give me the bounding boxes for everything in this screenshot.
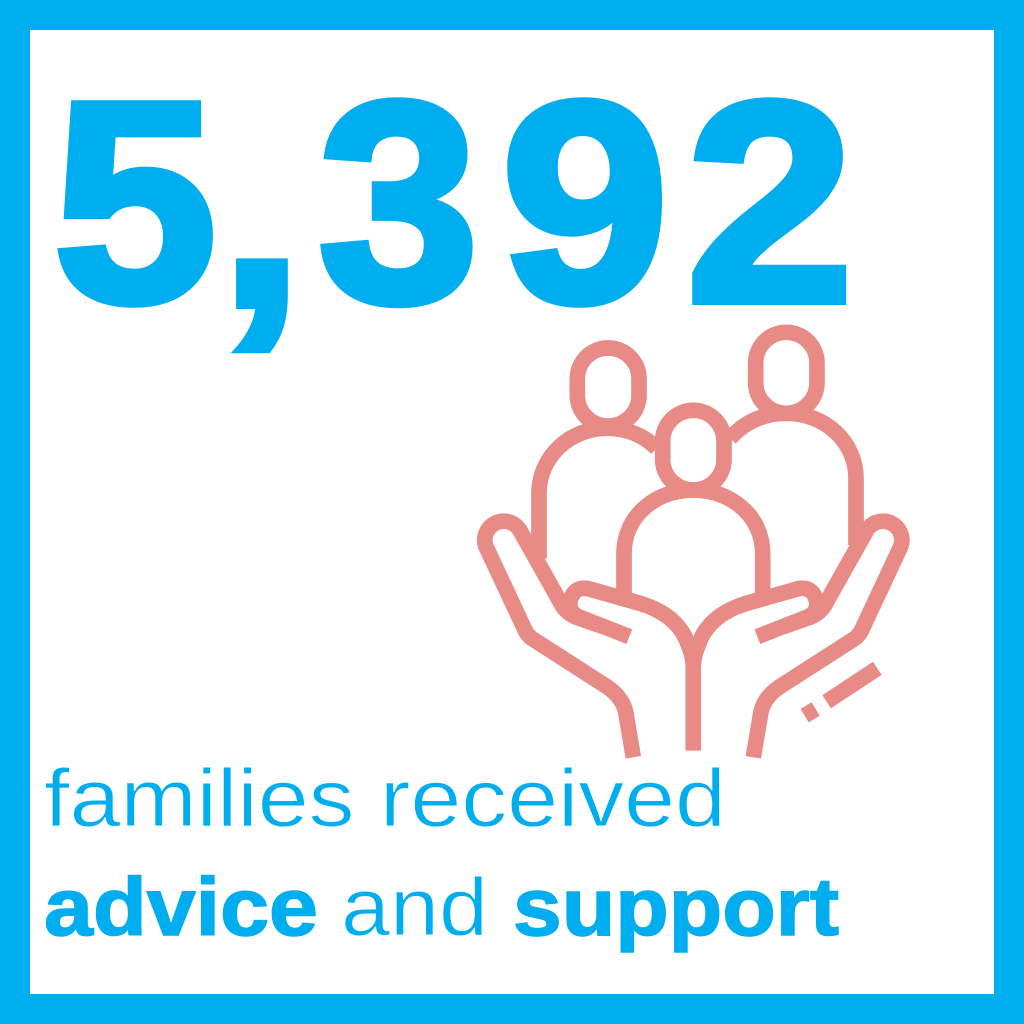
left adult head (577, 348, 639, 426)
right hand (753, 521, 902, 757)
caption line 1: families received (44, 753, 726, 844)
right adult head (756, 332, 817, 413)
right adult body (730, 413, 856, 545)
accent dash (827, 668, 877, 702)
accent dot (805, 709, 816, 716)
caption line 2: support (513, 862, 839, 953)
left fingers (570, 588, 693, 667)
child body (624, 490, 763, 593)
big number: 5,392: 9 (501, 42, 669, 362)
big number: 5,392: , (219, 46, 304, 366)
child head (663, 410, 724, 490)
left adult body (539, 428, 657, 558)
big number: 5,392 (53, 42, 854, 366)
icon: family held in caring hands (485, 332, 902, 757)
caption line 2 (44, 862, 839, 953)
big number: 5,392: 2 (686, 42, 854, 362)
right fingers (693, 588, 817, 751)
caption (44, 753, 839, 953)
left hand (485, 521, 633, 757)
big number: 5,392: 5 (53, 42, 217, 362)
big number: 5,392: 3 (318, 42, 479, 362)
caption line 2: and (341, 862, 488, 953)
caption line 2: advice (44, 862, 318, 953)
